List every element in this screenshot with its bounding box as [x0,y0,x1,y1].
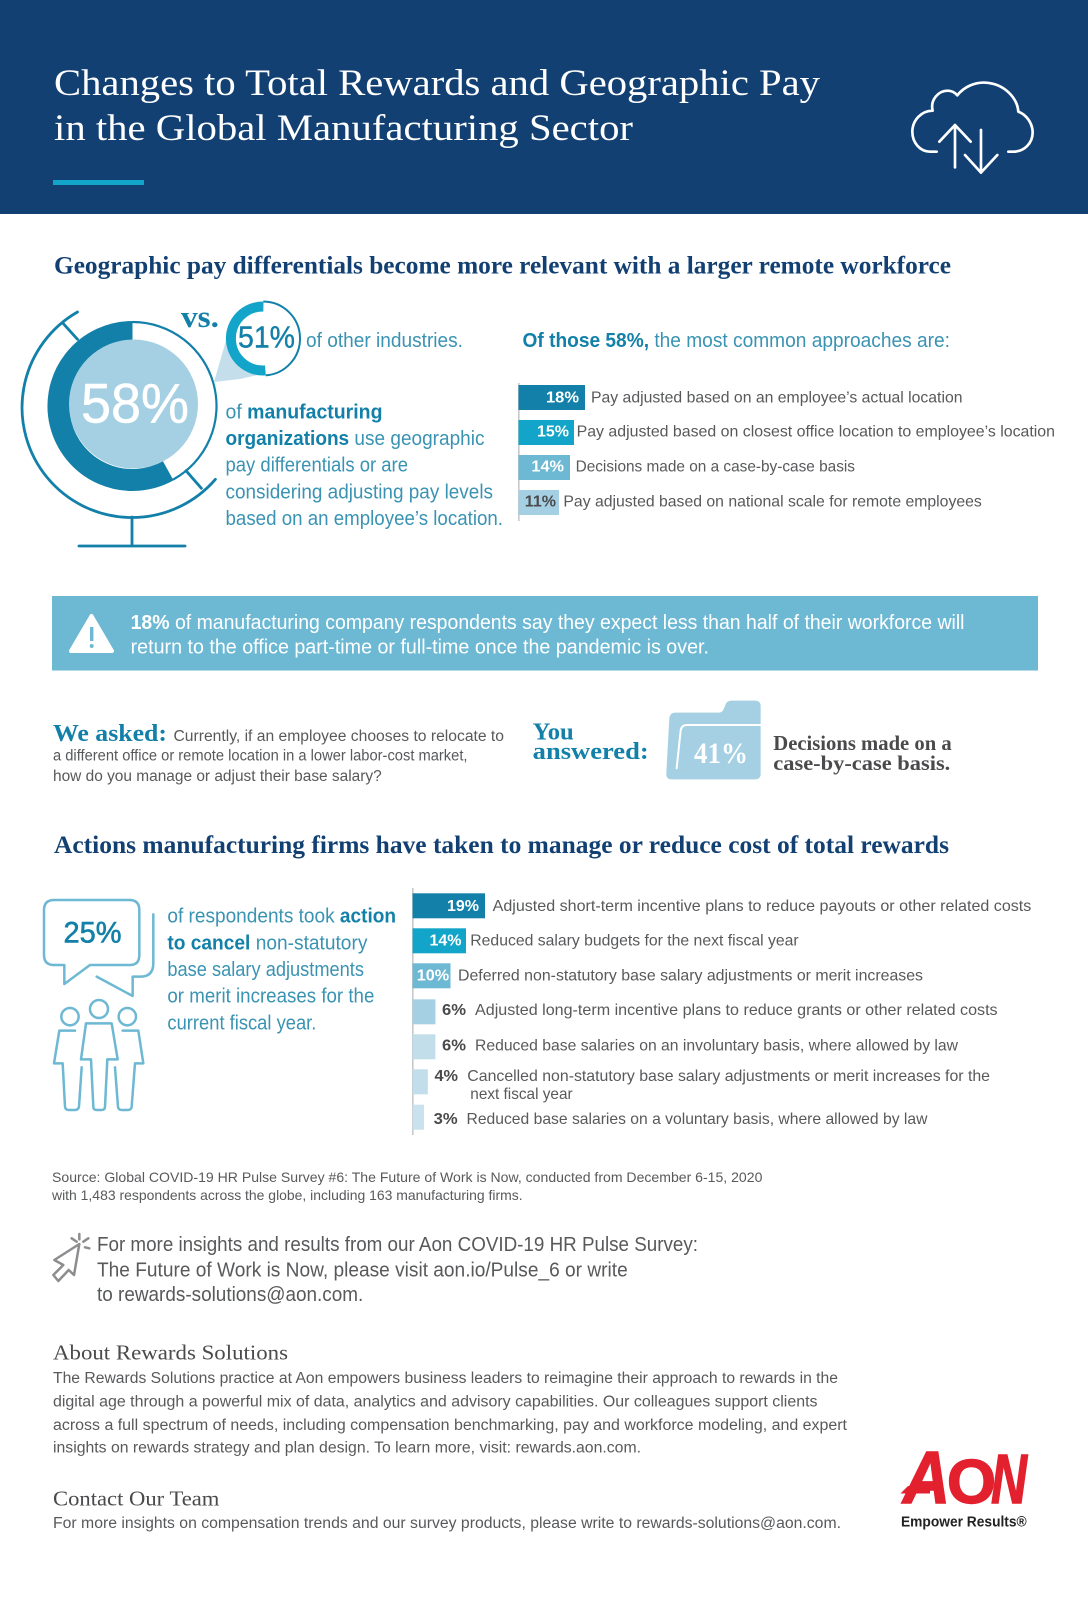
we asked question: how do you manage or adjust their base salary? [53,768,382,785]
logo: Aon Empower Results: A [901,1436,950,1519]
bar 14%: Decisions made on a case-by-case basis [576,459,855,476]
bar 11%: Pay adjusted based on national scale for remote employees [563,494,982,511]
about rewards solutions [53,1340,848,1456]
logo: Aon Empower Results: Empower Results® [901,1514,1027,1531]
text: manufacturing organizations description: organizations use geographic [226,427,484,450]
subheading: of those 58%: Of those 58%, the most common approaches are: [522,329,950,352]
answer text [773,731,952,775]
we asked question: Currently, if an employee chooses to relocate to [174,728,504,745]
bar 6% long-term [413,999,998,1024]
text: respondents action to cancel: current fiscal year. [167,1011,316,1034]
source note: with 1,483 respondents across the globe, including 163 manufacturing firms. [51,1187,523,1203]
callout text [131,611,965,658]
bar 18%: Pay adjusted based on an employee’s actual location [591,390,962,406]
bar 15%: Pay adjusted based on closest office location to employee’s location [577,424,1055,441]
bar 10%: 10% [417,967,449,984]
bar 18%: 18% [546,390,579,406]
bar 14%: Reduced salary budgets for the next fiscal year [470,933,799,950]
title: in the Global Manufacturing Sector [54,108,633,149]
25% value: 25% [64,916,122,949]
58% value: 58% [81,372,189,435]
bar chart: actions taken [412,888,1031,1135]
bar 6% involuntary: 6% [442,1037,466,1054]
globe chart: 58% [22,312,217,546]
you answered label [533,719,649,765]
icon: warning triangle [71,616,112,651]
source note: Source: Global COVID-19 HR Pulse Survey #6: The Future of Work is Now, conducted from December 6-15, 2020 [52,1169,763,1185]
vs label: vs. [181,299,219,334]
about rewards solutions: across a full spectrum of needs, including compensation benchmarking, pay and workforce modeling, and expert [53,1417,848,1434]
logo: Aon Empower Results: N [991,1440,1028,1518]
bar 11%: 11% [525,494,556,511]
text: more insights: For more insights and results from our Aon COVID-19 HR Pulse Survey: [97,1234,698,1256]
we asked question: a different office or remote location in a lower labor-cost market, [53,748,468,764]
bar 14%: 14% [531,459,564,476]
title accent bar [53,180,144,185]
answer text: Decisions made on a [773,731,952,755]
about rewards solutions: The Rewards Solutions practice at Aon empowers business leaders to reimagine their approach to rewards in the [53,1370,838,1387]
text: manufacturing organizations description: considering adjusting pay levels [226,480,493,504]
bar 4% [413,1068,990,1103]
you answered label: You [533,719,574,745]
text: respondents action to cancel: base salary adjustments [167,958,364,981]
text: manufacturing organizations description: based on an employee’s location. [226,507,503,530]
callout text: return to the office part-time or full-time once the pandemic is over. [131,636,709,658]
bar 4%: next fiscal year [470,1086,573,1103]
bar 15% [518,420,1055,445]
text: more insights: to rewards-solutions@aon.com. [97,1284,363,1306]
header banner [0,0,1088,214]
bar 19%: Adjusted short-term incentive plans to reduce payouts or other related costs [493,898,1031,915]
text: manufacturing organizations description: of manufacturing [226,400,382,424]
text: of other industries: of other industries. [306,329,463,352]
answer text: case-by-case basis. [773,751,950,775]
text: manufacturing organizations description: pay differentials or are [226,454,408,476]
bar 14%: 14% [430,933,462,950]
bar 6% long-term: Adjusted long-term incentive plans to reduce grants or other related costs [475,1002,998,1019]
text: manufacturing organizations description [226,400,503,530]
donut: 51% of other industries [214,302,300,382]
bar 11% [518,490,982,515]
bar 19%: 19% [447,898,479,915]
bar 10%: Deferred non-statutory base salary adjustments or merit increases [458,967,923,984]
callout banner: 18% expect less than half [52,596,1038,670]
text: respondents action to cancel: of respondents took action [167,905,396,928]
contact our team [53,1486,841,1532]
contact our team: For more insights on compensation trends and our survey products, please write to rewards-solutions@aon.com. [53,1515,841,1532]
bar 18% [518,385,962,410]
bar 15%: 15% [537,424,569,441]
bar 3%: 3% [434,1111,458,1128]
bar 4%: Cancelled non-statutory base salary adjustments or merit increases for the [467,1068,990,1085]
icon: cloud with up and down arrows [912,83,1033,173]
we asked question [53,720,504,785]
41% value: 41% [694,737,748,770]
bar 4%: 4% [434,1068,458,1085]
bar 3%: Reduced base salaries on a voluntary basis, where allowed by law [466,1111,928,1128]
text: respondents action to cancel [167,905,396,1034]
text: more insights [97,1234,698,1306]
heading: geographic pay differentials: Geographic pay differentials become more relevant with a larger remote workforce [54,250,951,280]
bar 14% [518,455,855,480]
heading: actions manufacturing firms: Actions manufacturing firms have taken to manage or reduce cost of total rewards [54,830,949,859]
bar 14% [413,928,799,953]
contact our team: Contact Our Team [53,1486,220,1510]
icon: people with speech bubbles [44,900,153,1110]
bar 10% [413,963,923,988]
text: respondents action to cancel: to cancel non-statutory [167,931,368,954]
text: more insights: The Future of Work is Now, please visit aon.io/Pulse_6 or write [97,1260,628,1282]
bar 19% [413,893,1031,918]
51% value: 51% [238,320,295,355]
you answered label: answered: [533,739,649,765]
title [54,63,821,149]
bar 6% long-term: 6% [442,1002,466,1019]
bar chart: most common approaches [518,383,1055,521]
logo: Aon Empower Results [900,1436,1028,1531]
text: respondents action to cancel: or merit increases for the [167,985,374,1008]
callout text: 18% of manufacturing company respondents say they expect less than half of their workforce will [131,611,965,634]
bar 6% involuntary [413,1034,958,1059]
we asked question: We asked: [53,720,167,747]
source note [51,1169,763,1203]
bar 3% [413,1105,928,1130]
about rewards solutions: insights on rewards strategy and plan design. To learn more, visit: rewards.aon.com. [53,1440,641,1456]
bar 6% involuntary: Reduced base salaries on an involuntary basis, where allowed by law [475,1037,958,1054]
about rewards solutions: digital age through a powerful mix of data, analytics and advisory capabilities. Our colleagues support clients [53,1394,818,1410]
logo: Aon Empower Results: O [947,1448,996,1517]
title: Changes to Total Rewards and Geographic Pay [54,63,821,104]
icon: folder with 41% [666,701,761,779]
icon: pointer cursor [53,1234,89,1281]
about rewards solutions: About Rewards Solutions [53,1340,288,1364]
